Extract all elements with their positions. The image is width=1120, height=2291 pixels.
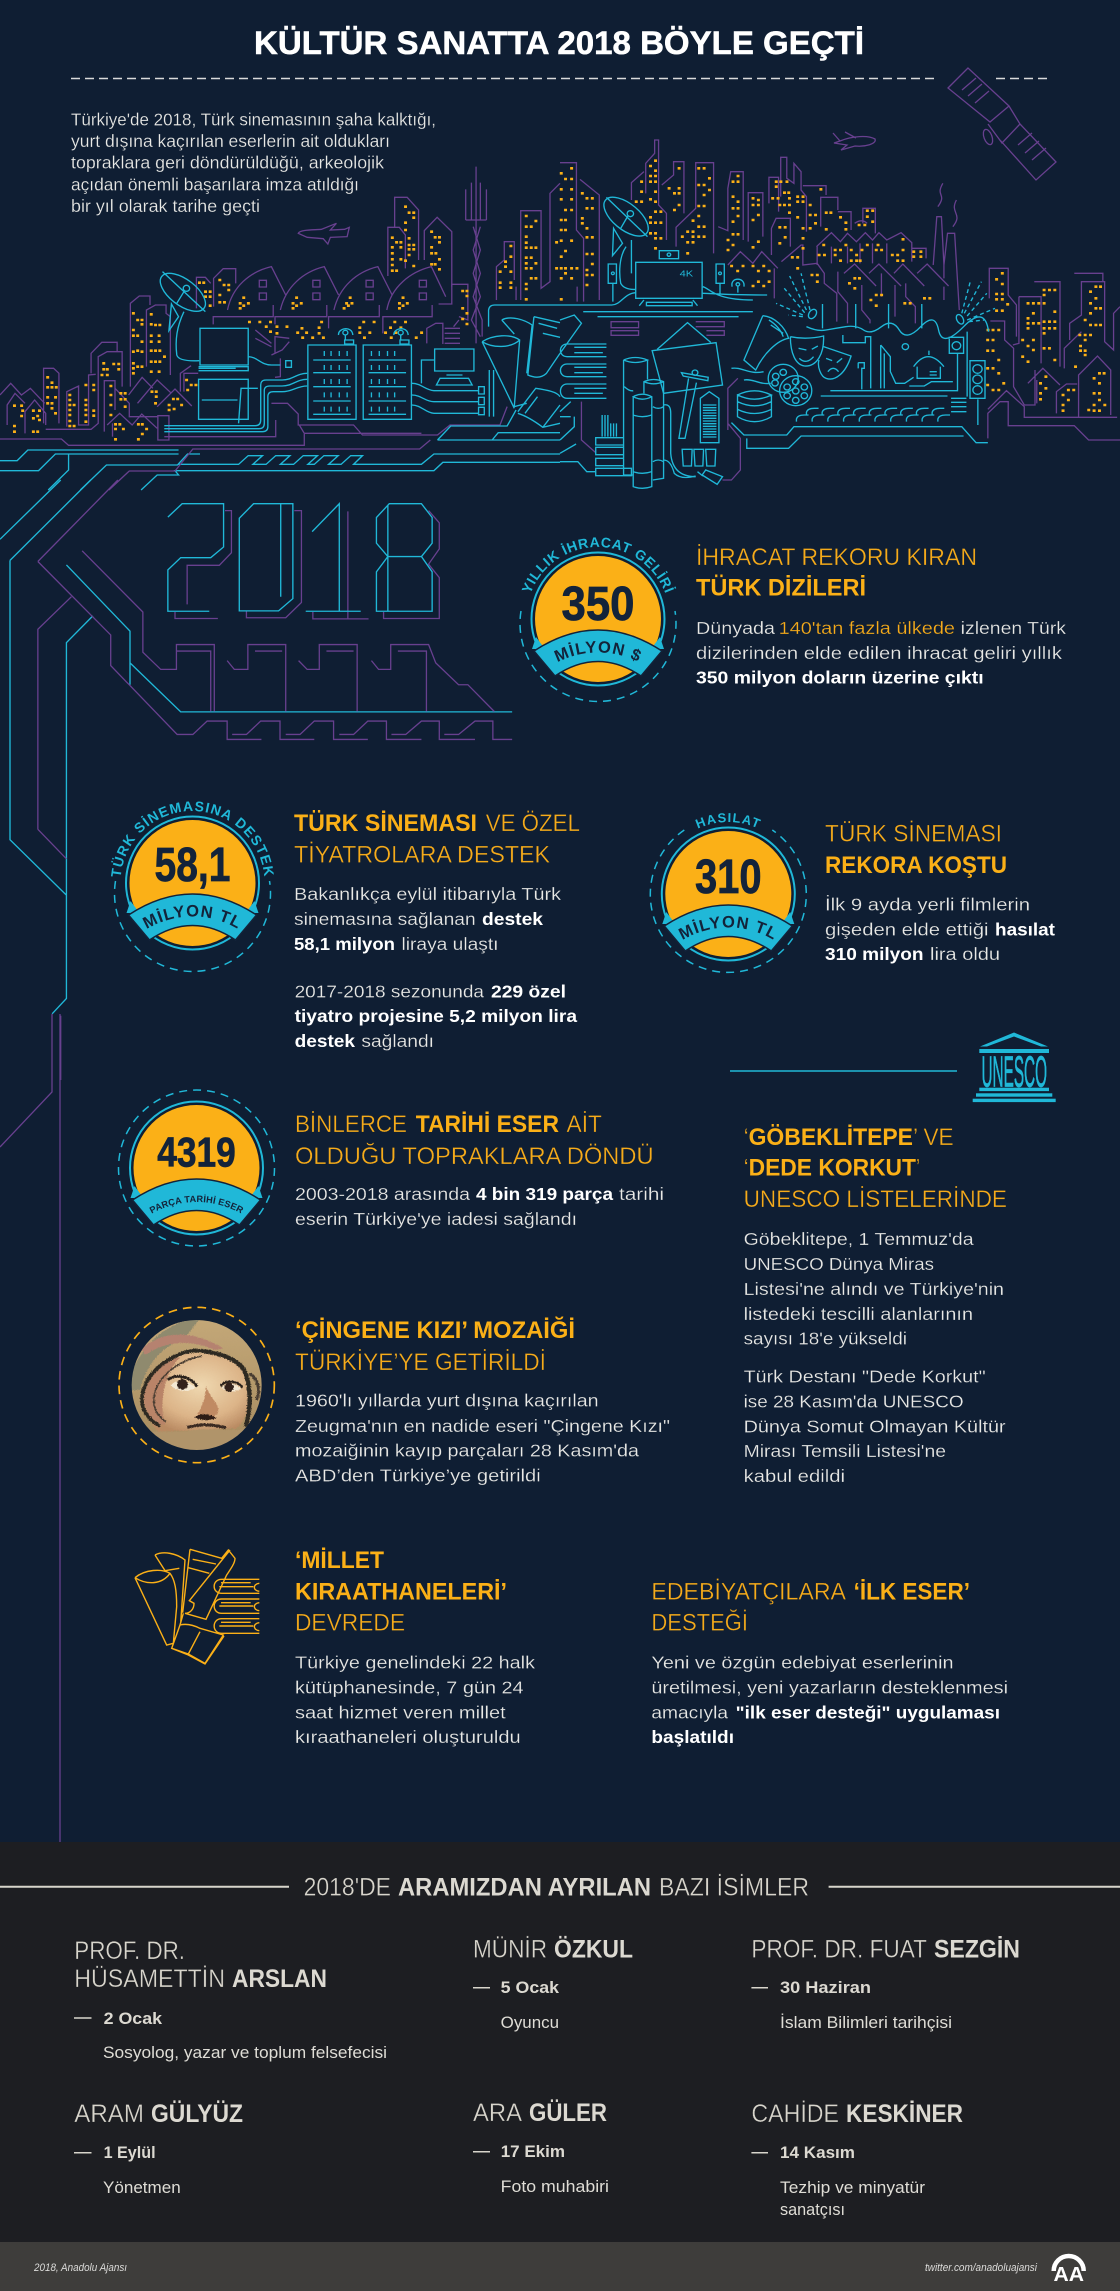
person: Ara Güler: ARA [473,2099,522,2127]
badge: 310 million TL [650,813,807,974]
heading: DEDE KORKUT [749,1155,916,1182]
obituary header: BAZI İSİMLER [659,1873,809,1902]
person: Münir Özkul: ÖZKUL [554,1935,633,1964]
body text: UNESCO Dünya Miras [744,1254,934,1274]
body text: Bakanlıkça eylül itibarıyla Türk [294,884,561,904]
heading [295,1111,654,1170]
illustration: city left side [0,167,560,490]
person: Ara Güler: 17 Ekim [501,2142,565,2161]
heading: UNESCO LİSTELERİNDE [744,1186,1007,1213]
panel: historical artifacts returned [118,1089,664,1247]
panel: nation reading rooms [135,1547,535,1747]
person: Cahide Keskiner: 14 Kasım [780,2143,855,2162]
body text: liraya ulaştı [402,934,498,954]
heading: KIRAATHANELERİ’ [295,1578,507,1606]
towers upper left [255,167,560,377]
body text [295,1184,664,1229]
heading: ’ VE [913,1124,954,1151]
value: 58,1 [154,839,230,892]
circuit traces left [0,305,560,490]
badge: 4319 artifacts [118,1089,276,1247]
title: KÜLTÜR SANATTA 2018 BÖYLE GEÇTİ [254,25,864,61]
person: Cahide Keskiner [751,2099,963,2219]
heading: TÜRK SİNEMASI [825,821,1002,848]
badge: 350 million dollars [519,537,677,702]
person: Münir Özkul: Oyuncu [501,2014,559,2032]
heading: OLDUĞU TOPRAKLARA DÖNDÜ [295,1143,654,1170]
panel: Turkish series export [519,537,1066,702]
person: Hüsamettin Arslan: 2 Ocak [104,2009,163,2028]
person: Fuat Sezgin [751,1936,1020,2032]
logo: Anadolu Agency [1054,2256,1084,2286]
person: Münir Özkul [473,1935,633,2032]
icon: UNESCO logo: UNESCO [982,1048,1047,1097]
body text [825,894,1055,964]
intro text: bir yıl olarak tarihe geçti [71,196,260,216]
heading [825,821,1007,879]
body text: sağlandı [361,1031,434,1051]
icon: UNESCO logo [973,1032,1056,1102]
body text: tiyatro projesine 5,2 milyon lira [295,1006,577,1026]
heading: ‘ [744,1124,749,1151]
person: Hüsamettin Arslan: ARSLAN [232,1965,327,1993]
heading: ‘İLK ESER’ [854,1578,970,1606]
icon: stage with spotlights [731,273,995,448]
windows left [14,207,557,439]
intro text [71,110,436,216]
2018 numerals [168,504,439,619]
body text [294,884,577,1051]
icon: satellite dish with television [560,190,767,317]
panel: cinema and theatre support [111,802,580,1051]
body text: gişeden elde ettiği [825,919,988,939]
divider [730,1070,957,1072]
footer twitter: twitter.com/anadoluajansi [925,2262,1037,2274]
body text: Yeni ve özgün edebiyat eserlerinin [651,1652,954,1672]
heading [294,810,580,869]
heading: ’ [916,1155,920,1182]
body text: 310 milyon [825,944,924,964]
body text: İlk 9 ayda yerli filmlerin [825,894,1030,914]
ribbon text: MİLYON TL [678,916,774,940]
obituary header [0,1873,1120,1902]
body text [295,1652,535,1747]
person: Münir Özkul: MÜNİR [473,1935,547,1964]
obituary header: ARAMIZDAN AYRILAN [398,1874,651,1902]
body text: başlatıldı [651,1727,734,1747]
body text: 2017-2018 sezonunda [295,981,484,1001]
circuit traces [0,480,512,1014]
panel: Gypsy Girl mosaic [119,1307,670,1486]
ribbon text: PARÇA TARİHİ ESER [149,1194,244,1214]
body text: Listesi'ne alındı ve Türkiye'nin [744,1279,1004,1299]
panel: obituaries [0,1842,1120,2242]
body text: Türk Destanı "Dede Korkut" [744,1366,986,1386]
ribbon text: MİLYON $ [554,641,641,662]
person: Aram Gülyüz: 1 Eylül [104,2143,156,2162]
body text: 4 bin 319 parça [476,1184,613,1204]
body text: kütüphanesinde, 7 gün 24 [295,1678,524,1698]
body text [744,1229,1006,1486]
illustration: city right side [560,140,1120,488]
panel: cinema box office record [650,813,1055,974]
server racks [308,345,411,419]
heading [295,1547,507,1637]
person: Fuat Sezgin: SEZGİN [934,1936,1020,1964]
person: Cahide Keskiner: sanatçısı [780,2201,845,2219]
heading: TÜRKİYE’YE GETİRİLDİ [295,1349,546,1376]
body text: 350 milyon doların üzerine çıktı [696,668,984,688]
body text: sayısı 18'e yükseldi [744,1329,907,1349]
heading: EDEBİYATÇILARA [651,1578,846,1606]
heading: DESTEĞİ [651,1610,748,1637]
server and computer machines [199,328,409,423]
obituary header: 2018'DE [304,1874,391,1902]
person: Ara Güler [473,2098,609,2196]
value: 4319 [157,1128,236,1176]
body text: Türkiye genelindeki 22 halk [295,1652,535,1672]
value: 350 [562,578,634,631]
heading [696,544,977,602]
heading: AİT [566,1111,602,1138]
body text: amacıyla [651,1702,728,1722]
body text: destek [295,1031,355,1051]
heading: İHRACAT REKORU KIRAN [696,544,977,571]
badge: 58,1 million TL [111,802,274,972]
body text: hasılat [995,919,1055,939]
heading: TÜRK DİZİLERİ [696,575,866,602]
body text: 140'tan fazla ülkede [779,618,955,638]
intro text: topraklara geri döndürüldüğü, arkeolojik [71,153,384,173]
value: 310 [695,851,762,904]
heading: ‘MİLLET [295,1547,384,1574]
footer credit: 2018, Anadolu Ajansı [33,2262,127,2274]
body text: sinemasına sağlanan [294,909,476,929]
photo: mosaic portrait [119,1307,274,1463]
heading [744,1124,1007,1213]
body text [696,618,1066,688]
person: Aram Gülyüz: Yönetmen [103,2179,181,2197]
body text: 1960'lı yıllarda yurt dışına kaçırılan [295,1391,599,1411]
body text: 58,1 milyon [294,934,395,954]
heading: TİYATROLARA DESTEK [294,842,550,869]
body text: ABD’den Türkiye’ye getirildi [295,1466,541,1486]
body text: ise 28 Kasım'da UNESCO [744,1392,964,1412]
heading: BİNLERCE [295,1111,407,1138]
person: Aram Gülyüz [74,2099,243,2197]
body text: Mirası Temsili Listesi'ne [744,1441,946,1461]
heading [651,1578,970,1637]
curved label: YILLIK İHRACAT GELİRİ [522,537,676,593]
illustration: circuit lines and 2018 outline numerals [0,480,512,1080]
person: Cahide Keskiner: CAHİDE [751,2099,839,2128]
person: Münir Özkul: 5 Ocak [501,1978,560,1997]
body text: destek [482,909,543,929]
heading: VE ÖZEL [486,810,580,837]
heading: GÖBEKLİTEPE [749,1124,913,1151]
body text: dizilerinden elde edilen ihracat geliri yıllık [696,643,1062,663]
body text: Dünyada [696,618,775,638]
person: Hüsamettin Arslan: HÜSAMETTİN [74,1964,225,1993]
body text [651,1652,1008,1747]
intro text: yurt dışına kaçırılan eserlerin ait oldukları [71,131,390,151]
body text: Dünya Somut Olmayan Kültür [744,1416,1006,1436]
person: Ara Güler: GÜLER [529,2098,607,2127]
heading: DEVREDE [295,1610,405,1637]
intro text: açıdan önemli başarılara imza atıldığı [71,174,359,194]
body text: eserin Türkiye'ye iadesi sağlandı [295,1209,577,1229]
curved label: HASILAT [695,813,761,828]
person: Hüsamettin Arslan [74,1937,387,2062]
body text: üretilmesi, yeni yazarların desteklenmesi [651,1678,1008,1698]
heading: REKORA KOŞTU [825,852,1007,879]
person: Aram Gülyüz: ARAM [74,2100,144,2128]
heading [295,1316,575,1376]
panel: first-work support for writers [651,1578,1008,1747]
icon: plane right [833,132,875,150]
icon: theatre masks and film reels [731,316,851,422]
icon: books and scrolls [135,1549,259,1664]
person: Aram Gülyüz: GÜLYÜZ [151,2099,243,2128]
ribbon text: MİLYON TL [142,904,238,928]
heading: ‘ÇİNGENE KIZI’ MOZAİĞİ [295,1316,575,1344]
heading: ‘ [744,1155,749,1182]
logo: Anadolu Agency: AA [1054,2264,1084,2286]
body text: kıraathaneleri oluşturuldu [295,1727,521,1747]
body text: kabul edildi [744,1466,845,1486]
icon: satellite [948,68,1056,180]
person: Ara Güler: Foto muhabiri [501,2178,609,2196]
body text: lira oldu [930,944,1000,964]
person: Fuat Sezgin: İslam Bilimleri tarihçisi [780,2013,952,2032]
icon: canvas, hammer and barcode [652,323,722,466]
title dashed rule [71,78,1050,80]
heading: TÜRK SİNEMASI [294,810,477,837]
windows right [561,161,1105,411]
scrolls and papers [482,317,560,427]
heading: TARİHİ ESER [416,1111,559,1138]
body text: "ilk eser desteği" uygulaması [736,1702,1000,1722]
body text: Göbeklitepe, 1 Temmuz'da [744,1229,974,1249]
body text: mozaiğinin kayıp parçaları 28 Kasım'da [295,1441,639,1461]
person: Cahide Keskiner: KESKİNER [846,2100,963,2128]
panel: Gobeklitepe and Dede Korkut [744,1124,1007,1486]
icon: satellite dish left [153,266,212,361]
body text: listedeki tescilli alanlarının [744,1304,973,1324]
person: Fuat Sezgin: 30 Haziran [780,1978,871,1997]
icon: books and cylinders [560,315,722,488]
city buildings left purple [0,296,507,445]
footer [0,2242,1120,2291]
body text [295,1391,670,1486]
icon: plane left [298,223,349,244]
intro text: Türkiye'de 2018, Türk sinemasının şaha kalktığı, [71,110,436,130]
circuit traces lower left [0,1014,60,1842]
body text: saat hizmet veren millet [295,1702,506,1722]
domed houses [196,267,468,333]
body text: 2003-2018 arasında [295,1184,470,1204]
icon: satellite dish with television: 4K [680,269,694,279]
curved label: TÜRK SİNEMASINA DESTEK [111,802,274,876]
person: Cahide Keskiner: Tezhip ve minyatür [780,2179,926,2197]
person: Hüsamettin Arslan: Sosyolog, yazar ve toplum felsefecisi [103,2044,387,2062]
person: Hüsamettin Arslan: PROF. DR. [74,1937,185,1965]
city buildings right purple [560,140,1120,480]
body text: tarihi [619,1184,664,1204]
body text: 229 özel [491,981,566,1001]
desktop computer and cables [164,349,494,432]
body text: Zeugma'nın en nadide eseri "Çingene Kızı" [295,1416,670,1436]
person: Fuat Sezgin: PROF. DR. FUAT [751,1936,927,1964]
body text: izlenen Türk [961,618,1066,638]
